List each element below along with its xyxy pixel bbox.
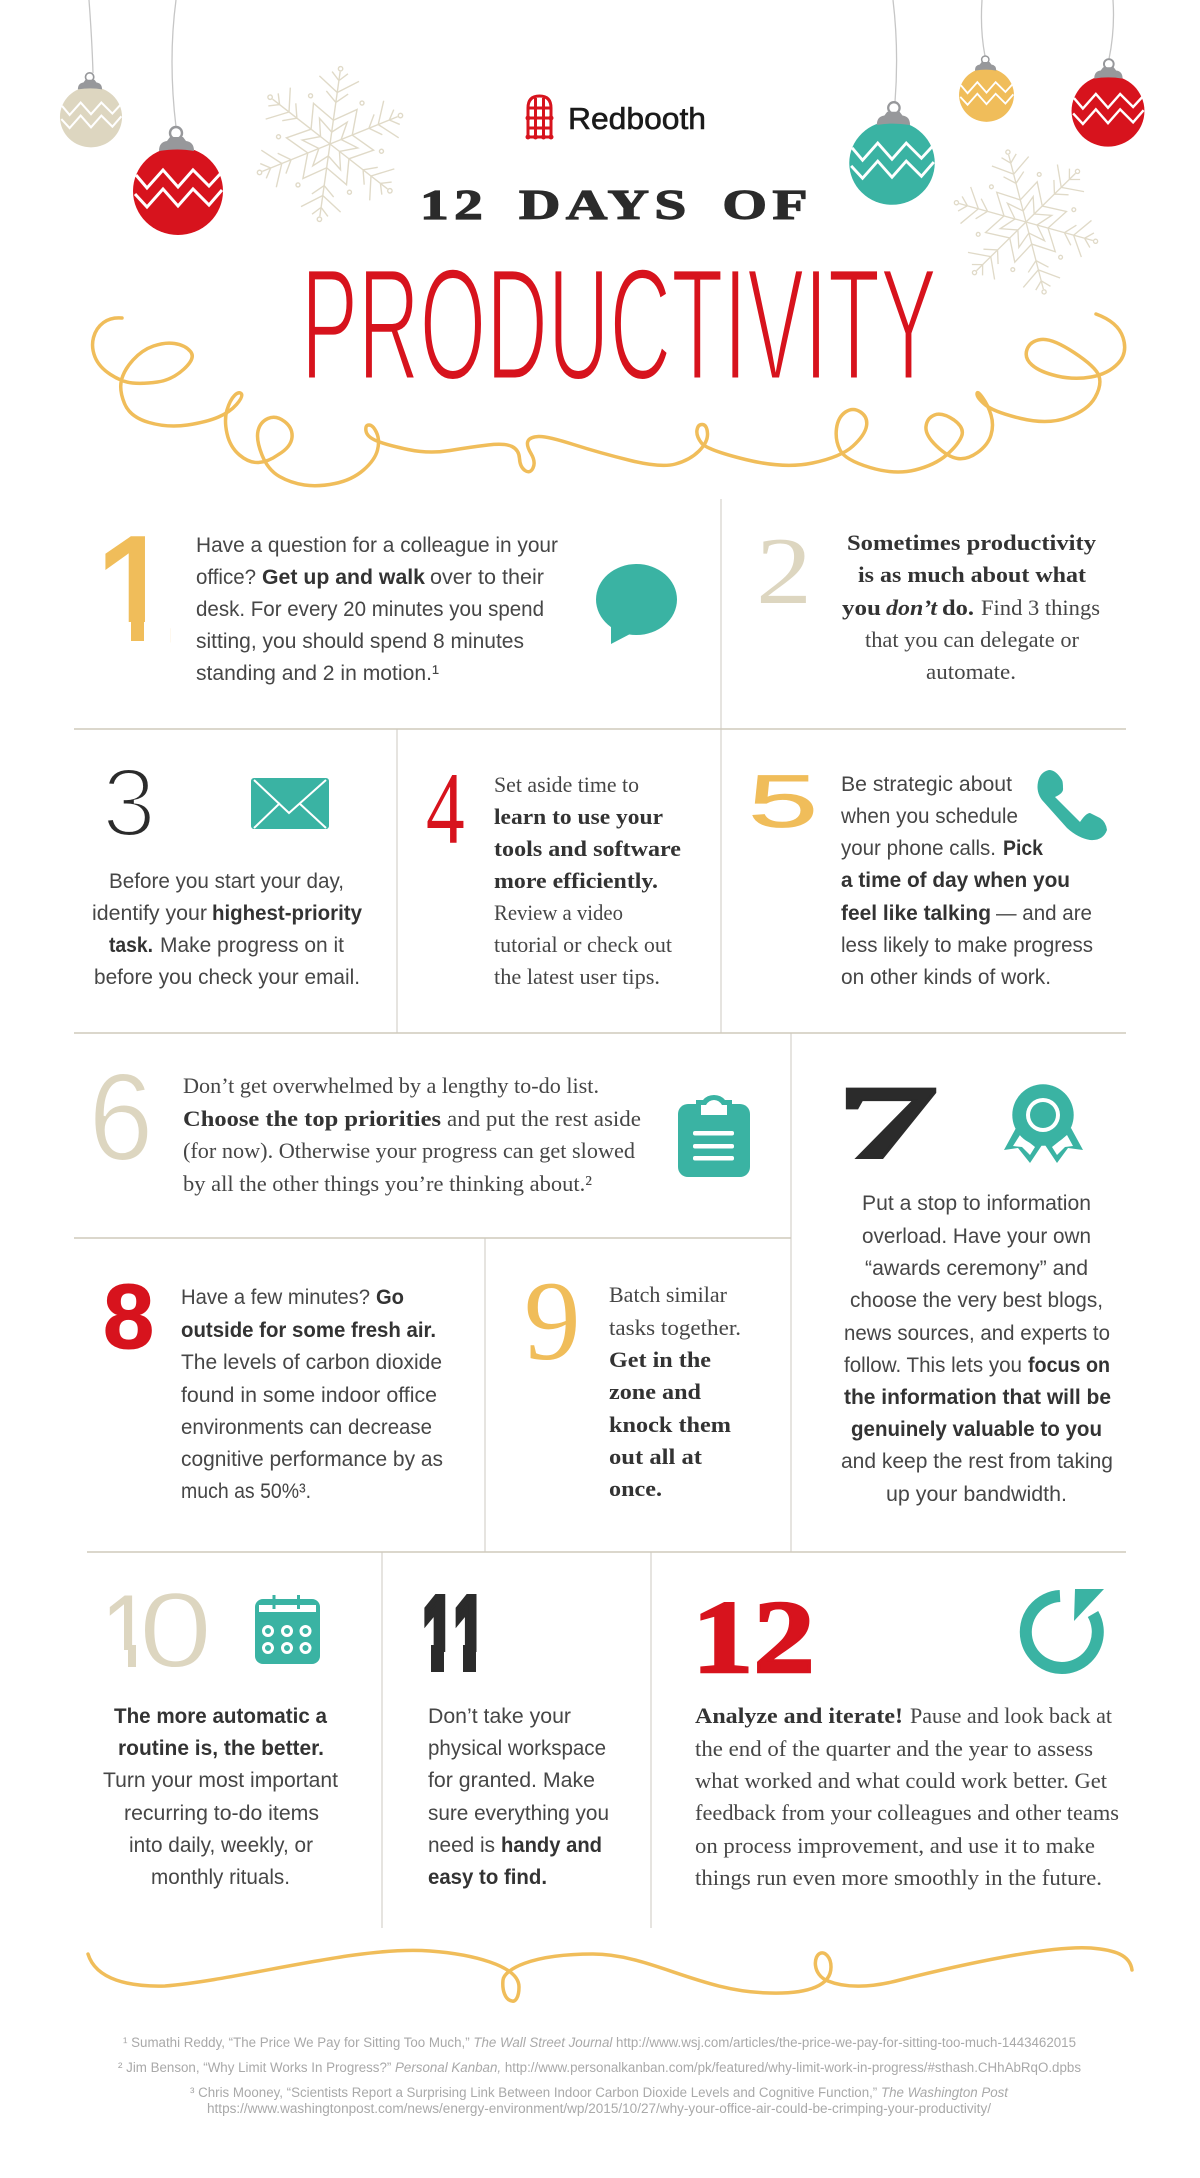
- text: tip 8: The levels of carbon dioxide: [181, 1351, 442, 1374]
- text: tip 11: Don’t take your: [428, 1705, 571, 1728]
- text: tip 3: task.: [109, 934, 153, 957]
- text: tip 5: when you schedule: [840, 805, 1018, 828]
- text: tip 6: by all the other things you’re thinking about.²: [183, 1171, 592, 1196]
- text: tip 6: and put the rest aside: [447, 1106, 641, 1131]
- number 4: 4: [426, 751, 465, 866]
- text: tip 5: a time of day when you: [841, 869, 1070, 892]
- text: tip 5: feel like talking: [841, 902, 991, 925]
- panel: tip 10: [95, 1570, 338, 1889]
- text: tip 7: “awards ceremony” and: [865, 1257, 1088, 1280]
- panel: tip 11: [410, 1575, 609, 1889]
- text: tip 5: Pick: [1003, 837, 1043, 860]
- text: tip 12: what worked and what could work better. Get: [695, 1768, 1107, 1793]
- icon: envelope: [251, 778, 329, 829]
- panel: tip 8: [103, 1266, 443, 1503]
- panel: tip 4: [426, 751, 681, 989]
- number 8: 8: [103, 1266, 154, 1368]
- text: tip 10: The more automatic a: [114, 1705, 327, 1728]
- text: tip 10: into daily, weekly, or: [129, 1834, 313, 1857]
- text: tip 1: over to their: [430, 566, 544, 589]
- swash: header flourish: [93, 314, 1125, 486]
- text: tip 11: physical workspace: [428, 1737, 606, 1760]
- text: tip 2: is as much about what: [858, 562, 1087, 587]
- text: tip 10: routine is, the better.: [118, 1737, 324, 1760]
- text: tip 7: Put a stop to information: [862, 1192, 1091, 1215]
- text: tip 5: [840, 773, 1093, 989]
- text: tip 12: on process improvement, and use it to make: [695, 1833, 1095, 1858]
- text: tip 7: the information that will be: [844, 1386, 1111, 1409]
- text: tip 8: outside for some fresh air.: [181, 1319, 436, 1342]
- text: tip 9: out all at: [609, 1444, 703, 1469]
- text: tip 12: feedback from your colleagues and other teams: [695, 1800, 1119, 1825]
- text: tip 1: desk. For every 20 minutes you spend: [196, 598, 544, 621]
- text: tip 9: tasks together.: [609, 1315, 741, 1340]
- title: 12 days of: 12 DAYS OF: [420, 183, 813, 229]
- text: tip 4: Set aside time to: [494, 772, 639, 797]
- text: tip 5: less likely to make progress: [841, 934, 1093, 957]
- panel: tip 7: [836, 1064, 1113, 1506]
- text: tip 4: tutorial or check out: [494, 932, 672, 957]
- title: productivity: PRODUCTIVITY: [301, 236, 937, 414]
- text: tip 2: Sometimes productivity: [847, 530, 1096, 555]
- text: tip 12: things run even more smoothly in the future.: [695, 1865, 1102, 1890]
- text: tip 4: [494, 772, 681, 989]
- panel: tip 1: [85, 505, 677, 685]
- footnotes: https://www.washingtonpost.com/news/energy-environment/wp/2015/10/27/why-your-office-air-could-be-crimping-your-productivity/: [207, 2101, 991, 2116]
- text: tip 11: sure everything you: [428, 1802, 609, 1825]
- ornament: teal bauble: [849, 0, 935, 205]
- text: tip 7: overload. Have your own: [862, 1225, 1091, 1248]
- text: tip 2: do.: [942, 595, 974, 620]
- text: tip 5: on other kinds of work.: [841, 966, 1051, 989]
- icon: refresh arrow: [1026, 1589, 1104, 1668]
- number 10: 0: [139, 1570, 212, 1690]
- icon: calendar: [255, 1595, 320, 1664]
- icon: award rosette: [1004, 1084, 1083, 1163]
- text: tip 8: much as 50%³.: [181, 1480, 311, 1503]
- text: tip 7: [841, 1192, 1113, 1506]
- ornament: yellow bauble: [959, 0, 1014, 122]
- text: tip 4: the latest user tips.: [494, 964, 660, 989]
- number 11: 11: [422, 1575, 485, 1696]
- text: tip 1: standing and 2 in motion.¹: [196, 662, 439, 685]
- text: tip 10: monthly rituals.: [151, 1866, 290, 1889]
- text: tip 1: [196, 534, 558, 685]
- number 2: 2: [756, 519, 812, 624]
- text: tip 10: Turn your most important: [103, 1769, 338, 1792]
- text: tip 11: easy to find.: [428, 1866, 547, 1889]
- ornament: large red bauble: [133, 0, 223, 235]
- number 5: 5: [748, 760, 818, 843]
- text: tip 12: the end of the quarter and the year to assess: [695, 1736, 1093, 1761]
- footnotes: ¹ Sumathi Reddy, “The Price We Pay for Sitting Too Much,” The Wall Street Journal http://www.wsj.com/articles/the-price-we-pay-for-sitting-too-much-1443462015: [123, 2035, 1076, 2050]
- number 7: 7: [836, 1064, 939, 1181]
- text: tip 4: learn to use your: [494, 804, 663, 829]
- number 12: 12: [692, 1580, 815, 1695]
- number 1: 1: [92, 505, 176, 673]
- text: tip 7: choose the very best blogs,: [850, 1289, 1103, 1312]
- text: tip 3: before you check your email.: [94, 966, 360, 989]
- text: tip 9: [609, 1282, 741, 1501]
- text: tip 3: identify your: [92, 902, 207, 925]
- text: tip 11: need is: [428, 1834, 495, 1857]
- text: tip 9: knock them: [609, 1412, 731, 1437]
- text: tip 11: handy and: [501, 1834, 602, 1857]
- text: tip 7: genuinely valuable to you: [851, 1418, 1102, 1441]
- snowflake: right: [932, 131, 1120, 313]
- icon: phone: [1038, 770, 1107, 840]
- text: tip 6: [183, 1073, 641, 1196]
- number 9: 9: [524, 1259, 580, 1384]
- text: tip 5: Be strategic about: [841, 773, 1012, 796]
- footnotes: ² Jim Benson, “Why Limit Works In Progress?” Personal Kanban, http://www.personalkanban.com/pk/featured/why-limit-work-in-progress/#sthash.CHhAbRqO.dpbs: [118, 2060, 1081, 2075]
- ornament: beige bauble: [60, 0, 122, 147]
- text: tip 12: Analyze and iterate!: [695, 1703, 903, 1728]
- text: tip 2: [842, 530, 1100, 684]
- number 10: 1: [101, 1573, 152, 1689]
- text: tip 2: Find 3 things: [981, 595, 1100, 620]
- text: tip 11: for granted. Make: [428, 1769, 595, 1792]
- text: tip 3: Make progress on it: [160, 934, 344, 957]
- text: tip 9: Batch similar: [609, 1282, 728, 1307]
- text: tip 1: sitting, you should spend 8 minutes: [196, 630, 524, 653]
- text: tip 7: up your bandwidth.: [886, 1483, 1067, 1506]
- footnotes: [118, 2035, 1081, 2116]
- text: tip 7: focus on: [1028, 1354, 1110, 1377]
- number 3: 3: [102, 748, 156, 857]
- text: tip 4: tools and software: [494, 836, 681, 861]
- text: tip 8: Have a few minutes?: [181, 1286, 370, 1309]
- logo: Redbooth: [526, 96, 706, 140]
- text: tip 12: [695, 1703, 1119, 1890]
- text: tip 8: environments can decrease: [181, 1416, 432, 1439]
- panel: tip 5: [748, 760, 1107, 989]
- text: tip 10: [103, 1705, 338, 1889]
- text: tip 9: Get in the: [609, 1347, 711, 1372]
- text: tip 9: once.: [609, 1476, 662, 1501]
- panel: tip 9: [524, 1259, 741, 1501]
- text: tip 6: (for now). Otherwise your progress can get slowed: [183, 1138, 635, 1163]
- text: tip 3: highest-priority: [212, 902, 362, 925]
- text: tip 8: cognitive performance by as: [181, 1448, 443, 1471]
- text: tip 10: recurring to-do items: [124, 1802, 319, 1825]
- swash: footer flourish: [88, 1948, 1132, 2001]
- text: tip 8: found in some indoor office: [181, 1384, 437, 1407]
- text: tip 4: Review a video: [494, 900, 623, 925]
- text: tip 12: Pause and look back at: [910, 1703, 1112, 1728]
- ornament: small red bauble: [1072, 0, 1144, 147]
- text: tip 3: Before you start your day,: [109, 870, 344, 893]
- panel: tip 3: [92, 748, 362, 989]
- number 10: [95, 1570, 212, 1690]
- panel: tip 12: [692, 1580, 1119, 1890]
- icon: speech bubble: [596, 564, 677, 644]
- snowflake: left: [238, 55, 422, 233]
- footnotes: ³ Chris Mooney, “Scientists Report a Surprising Link Between Indoor Carbon Dioxide Levels and Cognitive Function,” The Washington Post: [190, 2085, 1009, 2100]
- text: tip 3: [92, 870, 362, 989]
- panel: tip 2: [756, 519, 1100, 684]
- text: tip 4: more efficiently.: [494, 868, 658, 893]
- text: tip 5: your phone calls.: [841, 837, 996, 860]
- text: tip 1: office?: [196, 566, 256, 589]
- text: tip 2: that you can delegate or: [865, 627, 1080, 652]
- panel: tip 6: [88, 1049, 750, 1196]
- text: tip 6: Don’t get overwhelmed by a lengthy to-do list.: [183, 1073, 599, 1098]
- text: tip 8: Go: [376, 1286, 404, 1309]
- text: tip 1: Get up and walk: [262, 566, 425, 589]
- text: tip 2: you: [842, 595, 881, 620]
- text: tip 2: don’t: [886, 595, 938, 620]
- text: tip 8: [181, 1286, 443, 1503]
- text: tip 7: follow. This lets you: [844, 1354, 1022, 1377]
- icon: clipboard: [678, 1095, 750, 1177]
- text: tip 2: automate.: [926, 659, 1016, 684]
- text: tip 7: news sources, and experts to: [844, 1322, 1110, 1345]
- text: tip 1: Have a question for a colleague in your: [196, 534, 558, 557]
- text: tip 5: — and are: [996, 902, 1092, 925]
- number 6: 6: [88, 1049, 153, 1187]
- text: tip 11: [428, 1705, 609, 1889]
- text: tip 6: Choose the top priorities: [183, 1106, 441, 1131]
- logo: Redbooth: Redbooth: [568, 101, 706, 136]
- text: tip 9: zone and: [609, 1379, 701, 1404]
- text: tip 7: and keep the rest from taking: [841, 1450, 1113, 1473]
